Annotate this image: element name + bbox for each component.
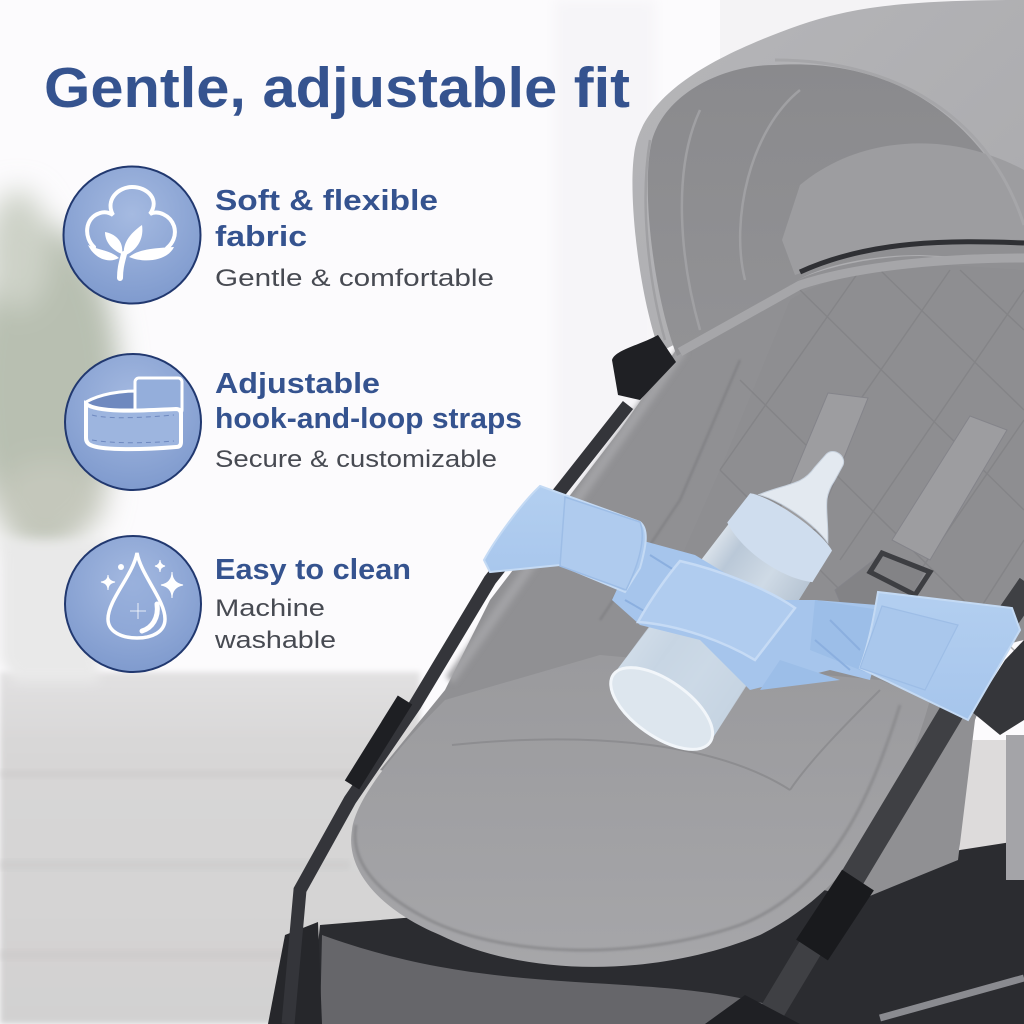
blue strap: [484, 486, 1020, 720]
feature 2 text: [215, 368, 522, 473]
bottle body: [600, 519, 819, 761]
icon: water drop: [65, 536, 201, 672]
seat top rim: [680, 258, 1024, 352]
stroller lower basket: [268, 840, 1024, 1024]
feature 1 text: Soft & flexible: [215, 185, 438, 217]
feature 2 text: Adjustable: [215, 368, 380, 400]
seat cushion: [351, 655, 930, 967]
right frame tube: [770, 585, 1024, 1015]
canopy hinge: [612, 335, 676, 400]
feature 3 text: washable: [214, 627, 336, 654]
background plant and pot: [0, 190, 120, 682]
bottle base ring: [597, 652, 726, 765]
frame joint: [972, 640, 1024, 735]
strap: left inner panel: [560, 497, 642, 590]
bottle teat: [759, 429, 873, 543]
seat side panel: [380, 235, 1024, 900]
bottle collar: [721, 486, 838, 591]
icon: strap: [65, 354, 201, 490]
strap: gathered section: [612, 540, 890, 690]
title: Gentle, adjustable fit: [44, 56, 630, 120]
feature 1 text: [215, 185, 494, 292]
feature 3 text: [214, 554, 411, 654]
stroller: [268, 0, 1024, 1024]
harness shoulder straps: [775, 393, 1007, 625]
strap: bottle band: [638, 561, 795, 660]
stroller right post: [1006, 735, 1024, 880]
icon: cotton: [64, 166, 200, 304]
feature 1 text: Gentle & comfortable: [215, 265, 494, 292]
canopy: [632, 0, 1024, 356]
feature 3 text: Machine: [215, 595, 325, 622]
feature 3 text: Easy to clean: [215, 554, 411, 586]
feature 2 text: Secure & customizable: [215, 446, 497, 473]
bottle: [597, 420, 888, 765]
feature 1 text: fabric: [215, 221, 307, 253]
harness buckle: [870, 553, 930, 595]
strap: right pad: [860, 592, 1020, 720]
left frame tube: [288, 405, 628, 1024]
feature 2 text: hook-and-loop straps: [215, 403, 522, 435]
bottle water line: [600, 568, 785, 761]
seat backrest quilting: [640, 264, 1024, 670]
strap: left pad: [484, 486, 646, 592]
